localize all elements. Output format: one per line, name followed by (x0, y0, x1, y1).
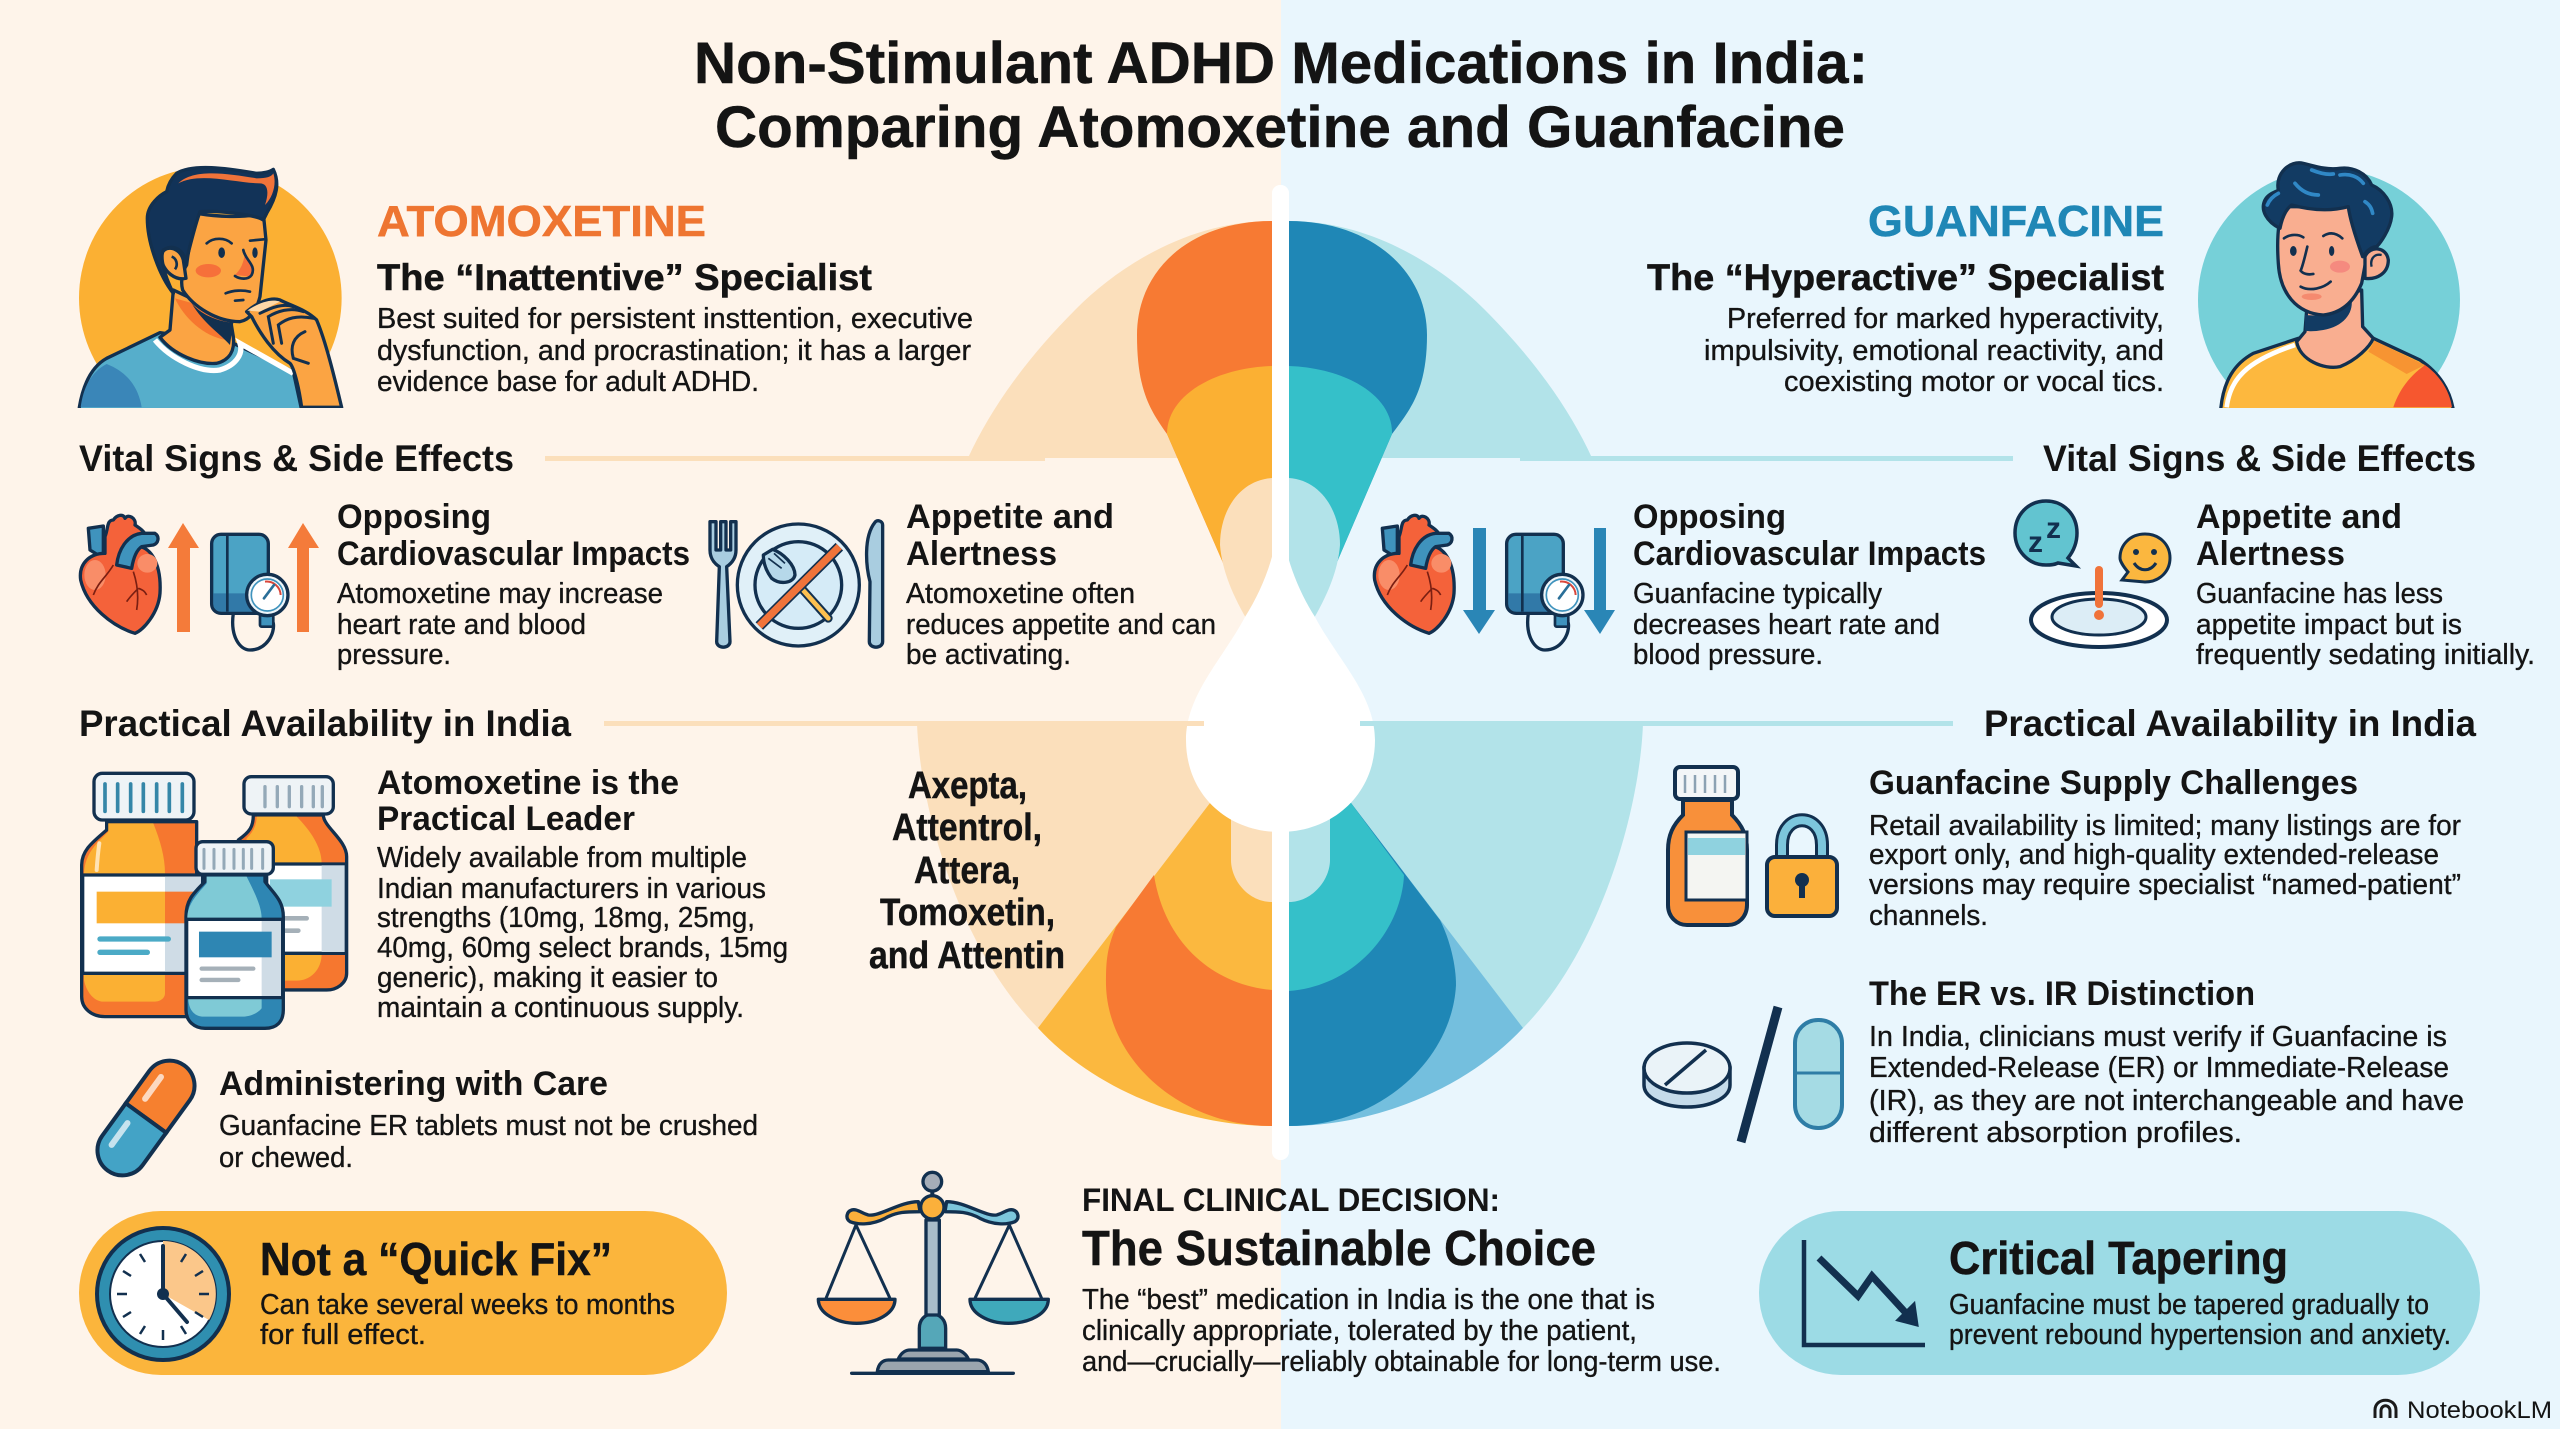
text: administering with care: Guanfacine ER tablets must not be crushed (219, 1110, 758, 1142)
text: atomoxetine appetite: Atomoxetine often (906, 578, 1135, 610)
panel: guanfacine summary: coexisting motor or vocal tics. (1784, 366, 2164, 398)
text: guanfacine appetite: Guanfacine has less (2196, 578, 2443, 610)
text: guanfacine supply challenges: channels. (1869, 900, 1988, 932)
panel: guanfacine summary: The “Hyperactive” Specialist (1647, 257, 2164, 298)
callout: critical tapering: Critical Tapering (1949, 1232, 2288, 1284)
title: Non-Stimulant ADHD Medications in India: (694, 31, 1868, 96)
panel: atomoxetine summary: ATOMOXETINE (377, 197, 706, 246)
text: guanfacine appetite: Appetite and (2196, 498, 2402, 536)
text: ER vs IR distinction: (IR), as they are not interchangeable and have (1869, 1085, 2464, 1117)
callout: not a quick fix: Can take several weeks to months (260, 1289, 675, 1321)
icon: sleep bubble, smiley and bowl (2015, 501, 2170, 647)
text: guanfacine supply challenges: Guanfacine Supply Challenges (1869, 764, 2358, 802)
icon: sleep bubble, smiley and bowl: z (2028, 526, 2043, 559)
icon: tablet, slash and capsule (1644, 1007, 1842, 1142)
text: guanfacine supply challenges: versions may require specialist “named-patient” (1869, 869, 2461, 901)
text: guanfacine cardiovascular (1633, 498, 1986, 671)
callout: not a quick fix (79, 1211, 727, 1375)
text: atomoxetine cardiovascular (337, 498, 690, 671)
icon: plate with crossed fork (710, 521, 883, 647)
text: atomoxetine is the practical leader: Indian manufacturers in various (377, 873, 766, 905)
heading: practical availability right: Practical Availability in India (1984, 703, 2476, 744)
icon: capsule (88, 1051, 204, 1185)
right central shapes (1289, 221, 1643, 1126)
heading: practical availability right (1360, 703, 2476, 744)
text: brand names: and Attentin (869, 935, 1065, 977)
text: guanfacine appetite: frequently sedating initially. (2196, 639, 2535, 671)
callout: critical tapering: Guanfacine must be tapered gradually to (1949, 1289, 2429, 1321)
text: ER vs IR distinction: different absorption profiles. (1869, 1117, 2242, 1149)
title: Comparing Atomoxetine and Guanfacine (715, 95, 1845, 160)
white drop (1186, 510, 1375, 832)
text: guanfacine appetite (2196, 498, 2535, 671)
panel: atomoxetine summary: dysfunction, and procrastination; it has a larger (377, 335, 971, 367)
text: guanfacine cardiovascular: blood pressure. (1633, 639, 1823, 671)
panel: atomoxetine summary: evidence base for adult ADHD. (377, 366, 759, 398)
icon: bottle and padlock (1668, 767, 1837, 925)
panel: guanfacine summary (1647, 197, 2164, 398)
icon: smiling man (guanfacine) (2198, 163, 2460, 431)
icon: thoughtful man (atomoxetine) (79, 167, 342, 429)
text: atomoxetine is the practical leader: maintain a continuous supply. (377, 992, 744, 1024)
panel: guanfacine summary: Preferred for marked hyperactivity, (1727, 303, 2164, 335)
icon: declining chart (1804, 1240, 1925, 1345)
text: brand names: Tomoxetin, (880, 892, 1055, 934)
text: atomoxetine is the practical leader: Widely available from multiple (377, 842, 747, 874)
icon: heart and blood pressure rising (80, 515, 319, 650)
heading: vital signs right: Vital Signs & Side Effects (2043, 438, 2476, 479)
icon: clock (97, 1228, 229, 1360)
panel: atomoxetine summary: The “Inattentive” Specialist (377, 257, 872, 298)
text: final clinical decision: The Sustainable Choice (1082, 1222, 1596, 1276)
text: guanfacine appetite: appetite impact but is (2196, 609, 2462, 641)
text: atomoxetine appetite (906, 498, 1216, 671)
text: ER vs IR distinction: In India, clinicians must verify if Guanfacine is (1869, 1021, 2447, 1053)
text: guanfacine cardiovascular: Guanfacine typically (1633, 578, 1882, 610)
text: atomoxetine cardiovascular: Cardiovascular Impacts (337, 535, 690, 573)
text: guanfacine cardiovascular: Cardiovascular Impacts (1633, 535, 1986, 573)
text: brand names (869, 765, 1065, 977)
watermark: NotebookLM: NotebookLM (2407, 1397, 2552, 1424)
heading: practical availability left (79, 703, 1204, 744)
text: ER vs IR distinction (1869, 975, 2464, 1149)
text: brand names: Attera, (914, 850, 1020, 892)
text: guanfacine cardiovascular: Opposing (1633, 498, 1786, 536)
text: atomoxetine is the practical leader: Practical Leader (377, 800, 635, 838)
text: ER vs IR distinction: The ER vs. IR Distinction (1869, 975, 2255, 1013)
text: final clinical decision (1082, 1182, 1721, 1378)
text: final clinical decision: The “best” medication in India is the one that is (1082, 1284, 1655, 1316)
title (694, 31, 1868, 160)
text: administering with care: Administering with Care (219, 1065, 608, 1103)
white centre bar (1272, 185, 1289, 1160)
callout: critical tapering: prevent rebound hypertension and anxiety. (1949, 1319, 2451, 1351)
icon: medicine bottles (82, 773, 347, 1028)
text: guanfacine supply challenges (1869, 764, 2461, 932)
heading: vital signs right (1520, 438, 2476, 479)
text: administering with care: or chewed. (219, 1142, 353, 1174)
callout: critical tapering (1759, 1211, 2480, 1375)
text: brand names: Attentrol, (892, 807, 1042, 849)
panel: guanfacine summary: impulsivity, emotional reactivity, and (1704, 335, 2164, 367)
text: guanfacine cardiovascular: decreases heart rate and (1633, 609, 1940, 641)
text: atomoxetine is the practical leader (377, 764, 788, 1024)
text: guanfacine supply challenges: export only, and high-quality extended-release (1869, 839, 2439, 871)
heading: vital signs left (79, 438, 1045, 479)
callout: not a quick fix: Not a “Quick Fix” (260, 1233, 612, 1285)
callout: not a quick fix: for full effect. (260, 1319, 426, 1351)
icon: sleep bubble, smiley and bowl: z (2046, 512, 2061, 545)
heading: practical availability left: Practical Availability in India (79, 703, 571, 744)
left central shapes (917, 221, 1272, 1126)
text: atomoxetine appetite: Appetite and (906, 498, 1114, 536)
text: brand names: Axepta, (908, 765, 1027, 807)
text: atomoxetine appetite: be activating. (906, 639, 1071, 671)
icon: heart and blood pressure falling (1374, 515, 1615, 650)
central graphic: two-sided droplet (917, 185, 1643, 1160)
panel: atomoxetine summary: Best suited for persistent insttention, executive (377, 303, 973, 335)
text: atomoxetine cardiovascular: pressure. (337, 639, 451, 671)
text: atomoxetine is the practical leader: Atomoxetine is the (377, 764, 679, 802)
heading: vital signs left: Vital Signs & Side Effects (79, 438, 514, 479)
text: atomoxetine is the practical leader: strengths (10mg, 18mg, 25mg, (377, 902, 755, 934)
text: atomoxetine cardiovascular: Atomoxetine may increase (337, 578, 663, 610)
text: administering with care (219, 1065, 758, 1174)
text: atomoxetine cardiovascular: heart rate and blood (337, 609, 586, 641)
text: guanfacine supply challenges: Retail availability is limited; many listings are for (1869, 810, 2461, 842)
text: atomoxetine cardiovascular: Opposing (337, 498, 491, 536)
text: ER vs IR distinction: Extended-Release (ER) or Immediate-Release (1869, 1052, 2449, 1084)
panel: guanfacine summary: GUANFACINE (1868, 197, 2164, 246)
text: atomoxetine appetite: reduces appetite and can (906, 609, 1216, 641)
text: final clinical decision: FINAL CLINICAL DECISION: (1082, 1182, 1500, 1218)
text: final clinical decision: clinically appropriate, tolerated by the patient, (1082, 1315, 1637, 1347)
panel: atomoxetine summary (377, 197, 973, 398)
text: final clinical decision: and—crucially—reliably obtainable for long-term use. (1082, 1346, 1721, 1378)
text: atomoxetine is the practical leader: generic), making it easier to (377, 962, 718, 994)
text: atomoxetine appetite: Alertness (906, 535, 1057, 573)
icon: balance scale (818, 1172, 1048, 1373)
text: atomoxetine is the practical leader: 40mg, 60mg select brands, 15mg (377, 932, 788, 964)
text: guanfacine appetite: Alertness (2196, 535, 2345, 573)
